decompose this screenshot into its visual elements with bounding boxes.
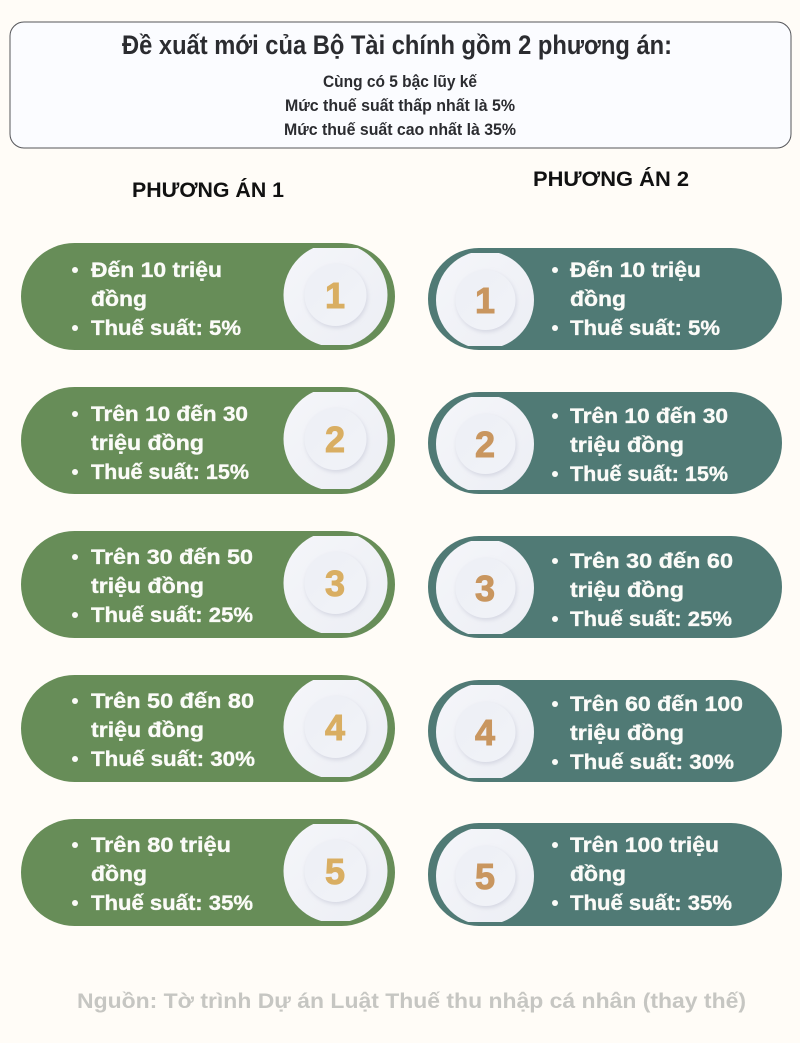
text: Đến 10 triệu xyxy=(91,259,222,282)
text: Trên 10 đến 30 xyxy=(570,405,728,428)
title: Đề xuất mới của Bộ Tài chính gồm 2 phương án: xyxy=(122,30,672,60)
panel: phương án 2 bậc 2 xyxy=(428,392,782,494)
text xyxy=(72,546,253,627)
number 1: 1 xyxy=(475,280,495,321)
text: Thuế suất: 25% xyxy=(91,604,253,627)
text: triệu đồng xyxy=(91,719,204,742)
text: Trên 30 đến 50 xyxy=(91,546,253,569)
text: Trên 30 đến 60 xyxy=(570,550,733,573)
number 4: 4 xyxy=(475,712,495,753)
text: Thuế suất: 30% xyxy=(570,751,734,774)
text: đồng xyxy=(570,863,626,886)
number 1: 1 xyxy=(325,275,345,316)
summary line 2: Mức thuế suất thấp nhất là 5% xyxy=(285,97,515,115)
text: Thuế suất: 15% xyxy=(91,461,249,484)
text: Thuế suất: 5% xyxy=(91,317,241,340)
header panel xyxy=(10,22,791,148)
text: Thuế suất: 35% xyxy=(570,892,732,915)
text xyxy=(72,834,253,915)
panel: phương án 2 bậc 5 xyxy=(428,823,782,926)
text: Thuế suất: 35% xyxy=(91,892,253,915)
number 3: 3 xyxy=(475,568,495,609)
heading: phương án 2: PHƯƠNG ÁN 2 xyxy=(533,168,689,191)
panel: phương án 2 bậc 4 xyxy=(428,680,782,782)
text: Đến 10 triệu xyxy=(570,259,701,282)
text xyxy=(552,259,720,340)
text: triệu đồng xyxy=(91,432,204,455)
text xyxy=(72,690,255,771)
text: Thuế suất: 25% xyxy=(570,608,732,631)
text: Trên 50 đến 80 xyxy=(91,690,254,713)
text: đồng xyxy=(570,288,626,311)
number 4: 4 xyxy=(325,707,345,748)
panel: phương án 1 bậc 4 xyxy=(21,675,395,782)
panel: phương án 1 bậc 1 xyxy=(21,243,395,350)
text: Trên 60 đến 100 xyxy=(570,693,743,716)
summary line 3: Mức thuế suất cao nhất là 35% xyxy=(284,121,516,139)
summary line 1: Cùng có 5 bậc lũy kế xyxy=(323,73,478,91)
panel: phương án 1 bậc 2 xyxy=(21,387,395,494)
text: triệu đồng xyxy=(570,579,684,602)
text: Thuế suất: 15% xyxy=(570,463,728,486)
text: đồng xyxy=(91,288,147,311)
text: triệu đồng xyxy=(91,575,204,598)
panel: phương án 1 bậc 3 xyxy=(21,531,395,638)
text: Thuế suất: 5% xyxy=(570,317,720,340)
text: triệu đồng xyxy=(570,434,684,457)
text: Trên 100 triệu xyxy=(570,834,719,857)
panel: phương án 2 bậc 3 xyxy=(428,536,782,638)
source note: Nguồn: Tờ trình Dự án Luật Thuế thu nhập cá nhân (thay thế) xyxy=(77,990,746,1013)
text xyxy=(72,403,249,484)
text: Trên 10 đến 30 xyxy=(91,403,248,426)
text xyxy=(552,405,728,486)
panel: phương án 2 bậc 1 xyxy=(428,248,782,350)
number 2: 2 xyxy=(325,419,345,460)
text xyxy=(72,259,241,340)
text: Trên 80 triệu xyxy=(91,834,231,857)
text xyxy=(552,834,732,915)
text xyxy=(552,550,733,631)
text: đồng xyxy=(91,863,147,886)
number 3: 3 xyxy=(325,563,345,604)
number 5: 5 xyxy=(475,856,495,897)
text xyxy=(552,693,743,774)
text: Thuế suất: 30% xyxy=(91,748,255,771)
panel: phương án 1 bậc 5 xyxy=(21,819,395,926)
text: triệu đồng xyxy=(570,722,684,745)
number 2: 2 xyxy=(475,424,495,465)
heading: phương án 1: PHƯƠNG ÁN 1 xyxy=(132,179,284,202)
number 5: 5 xyxy=(325,851,345,892)
